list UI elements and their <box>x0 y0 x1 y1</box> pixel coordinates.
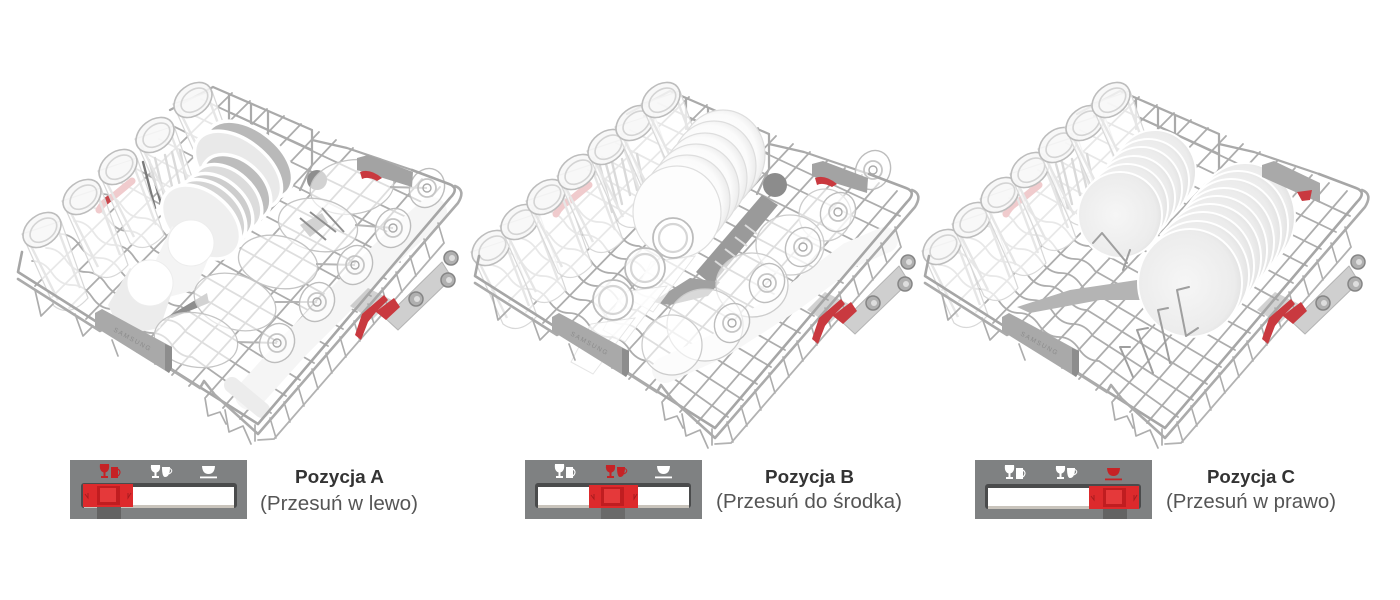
control: position A <box>70 460 247 519</box>
label: position A: (Przesuń w lewo) <box>260 493 418 515</box>
wine glass feet A <box>253 163 451 368</box>
plate holder hooks C <box>1093 233 1198 377</box>
white items along right side B <box>665 240 885 370</box>
central spray arm B <box>652 173 787 305</box>
clip A <box>357 155 413 187</box>
label: position C <box>1166 466 1336 513</box>
label: position A: Pozycja A <box>295 466 384 487</box>
panel: position B <box>465 75 918 448</box>
wine glasses A <box>150 154 427 374</box>
panel: position A <box>16 75 461 444</box>
large plates C <box>1138 163 1295 337</box>
central spray arm A <box>167 170 328 318</box>
rack front A <box>18 170 461 444</box>
label: position B: (Przesuń do środka) <box>716 491 902 513</box>
label: position A <box>260 466 418 515</box>
wine glass feet B <box>708 145 897 348</box>
label: position C: Pozycja C <box>1207 466 1295 487</box>
central wedge C <box>1017 280 1143 313</box>
clip C <box>1262 161 1320 203</box>
rack B wires <box>489 91 900 423</box>
handle C <box>1002 313 1079 377</box>
wine glasses B <box>642 189 851 375</box>
white items along right side A <box>250 212 432 395</box>
control: position B <box>525 460 702 519</box>
red tab C <box>1297 190 1312 201</box>
label: position B <box>716 466 902 513</box>
label: position C: (Przesuń w prawo) <box>1166 491 1336 513</box>
label: position B: Pozycja B <box>765 466 854 487</box>
control: position C <box>975 460 1152 519</box>
plates B <box>633 110 765 258</box>
small plates C <box>1078 130 1196 258</box>
handle B <box>552 313 629 377</box>
rack front B <box>475 174 918 448</box>
panel: position C <box>916 75 1368 448</box>
cups A <box>108 220 214 335</box>
tumblers A <box>16 75 239 310</box>
tumblers centre B <box>571 218 695 374</box>
clip B <box>812 161 868 193</box>
plates A <box>147 106 307 274</box>
rack A wires <box>32 87 443 419</box>
rack front C <box>925 174 1368 448</box>
tumblers C <box>916 75 1157 328</box>
handle A <box>95 309 172 373</box>
tumblers B <box>465 75 707 328</box>
rack C wires <box>939 91 1350 423</box>
